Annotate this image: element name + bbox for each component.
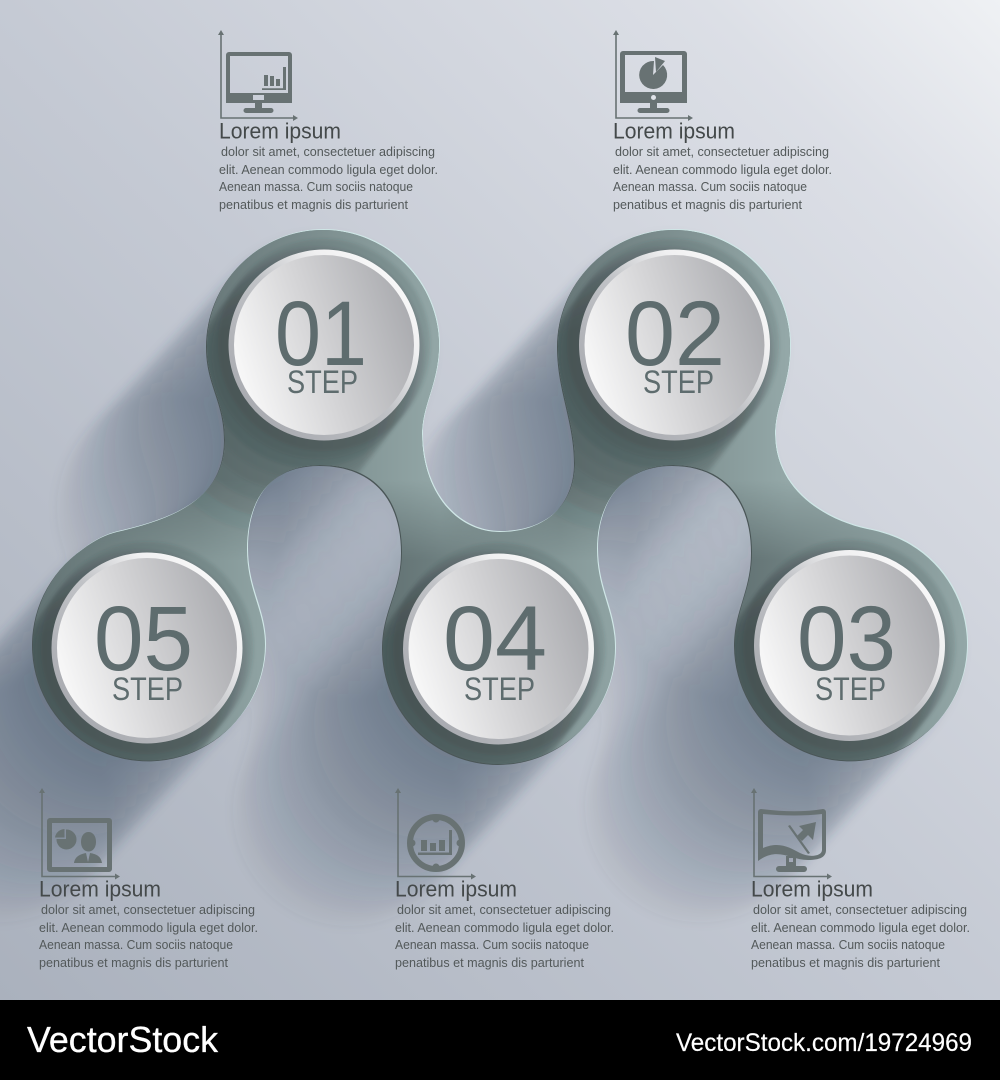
icon: monitor with bar chart on axes — [218, 30, 298, 121]
text block: step 05: dolor sit amet, consectetuer adipiscing — [41, 903, 255, 917]
disc: step 03: STEP — [815, 671, 886, 707]
text block: step 02: penatibus et magnis dis parturient — [613, 198, 803, 212]
text block: step 05: penatibus et magnis dis parturient — [39, 956, 229, 970]
text block: step 01: dolor sit amet, consectetuer adipiscing — [221, 145, 435, 159]
text block: step 02: dolor sit amet, consectetuer adipiscing — [615, 145, 829, 159]
text block: step 02 — [613, 118, 832, 212]
text block: step 02: Aenean massa. Cum sociis natoque — [613, 180, 807, 194]
disc: step 02: 02 — [625, 283, 725, 385]
text block: step 04: Lorem ipsum — [395, 876, 517, 902]
icon: circular badge with bar chart on axes — [395, 788, 476, 880]
disc: step 02 — [579, 250, 770, 440]
text block: step 05: elit. Aenean commodo ligula eget dolor. — [39, 921, 258, 935]
text block: step 01: penatibus et magnis dis parturient — [219, 198, 409, 212]
footer bar: VectorStock.com/19724969 — [676, 1029, 972, 1057]
text block: step 01: elit. Aenean commodo ligula eget dolor. — [219, 163, 438, 177]
text block: step 04: Aenean massa. Cum sociis natoque — [395, 938, 589, 952]
disc: step 05: 05 — [94, 588, 193, 690]
text block: step 02: Lorem ipsum — [613, 118, 735, 144]
disc: step 04: 04 — [443, 588, 547, 690]
text block: step 03: dolor sit amet, consectetuer adipiscing — [753, 903, 967, 917]
disc: step 05 — [52, 552, 242, 744]
text block: step 04 — [395, 876, 614, 970]
text block: step 03: Lorem ipsum — [751, 876, 873, 902]
disc: step 04 — [403, 554, 594, 744]
text block: step 03: elit. Aenean commodo ligula eget dolor. — [751, 921, 970, 935]
connected rings shape — [32, 229, 968, 765]
disc: step 03: 03 — [797, 588, 896, 690]
footer bar — [0, 1000, 1000, 1080]
disc: step 02: STEP — [643, 364, 714, 400]
icon: monitor with pie chart on axes — [613, 30, 693, 121]
text block: step 03 — [751, 876, 970, 970]
text block: step 05: Aenean massa. Cum sociis natoque — [39, 938, 233, 952]
disc: step 05: STEP — [112, 671, 183, 707]
disc: step 01: STEP — [287, 364, 358, 400]
disc: step 04: STEP — [464, 671, 535, 707]
text block: step 03: Aenean massa. Cum sociis natoque — [751, 938, 945, 952]
text block: step 01 — [219, 118, 438, 212]
text block: step 01: Aenean massa. Cum sociis natoque — [219, 180, 413, 194]
disc: step 01: 01 — [275, 283, 367, 385]
text block: step 04: penatibus et magnis dis parturient — [395, 956, 585, 970]
text block: step 02: elit. Aenean commodo ligula eget dolor. — [613, 163, 832, 177]
icon: tablet with presenter and pie chart on axes — [39, 788, 120, 880]
text block: step 05 — [39, 876, 258, 970]
text block: step 03: penatibus et magnis dis parturient — [751, 956, 941, 970]
footer bar: VectorStock — [27, 1019, 219, 1060]
text block: step 01: Lorem ipsum — [219, 118, 341, 144]
icon: curved monitor with rising arrow on axes — [751, 788, 832, 880]
text block: step 04: dolor sit amet, consectetuer adipiscing — [397, 903, 611, 917]
disc: step 03 — [754, 550, 945, 741]
long cast shadow — [0, 234, 963, 926]
disc: step 01 — [228, 250, 420, 440]
text block: step 04: elit. Aenean commodo ligula eget dolor. — [395, 921, 614, 935]
text block: step 05: Lorem ipsum — [39, 876, 161, 902]
